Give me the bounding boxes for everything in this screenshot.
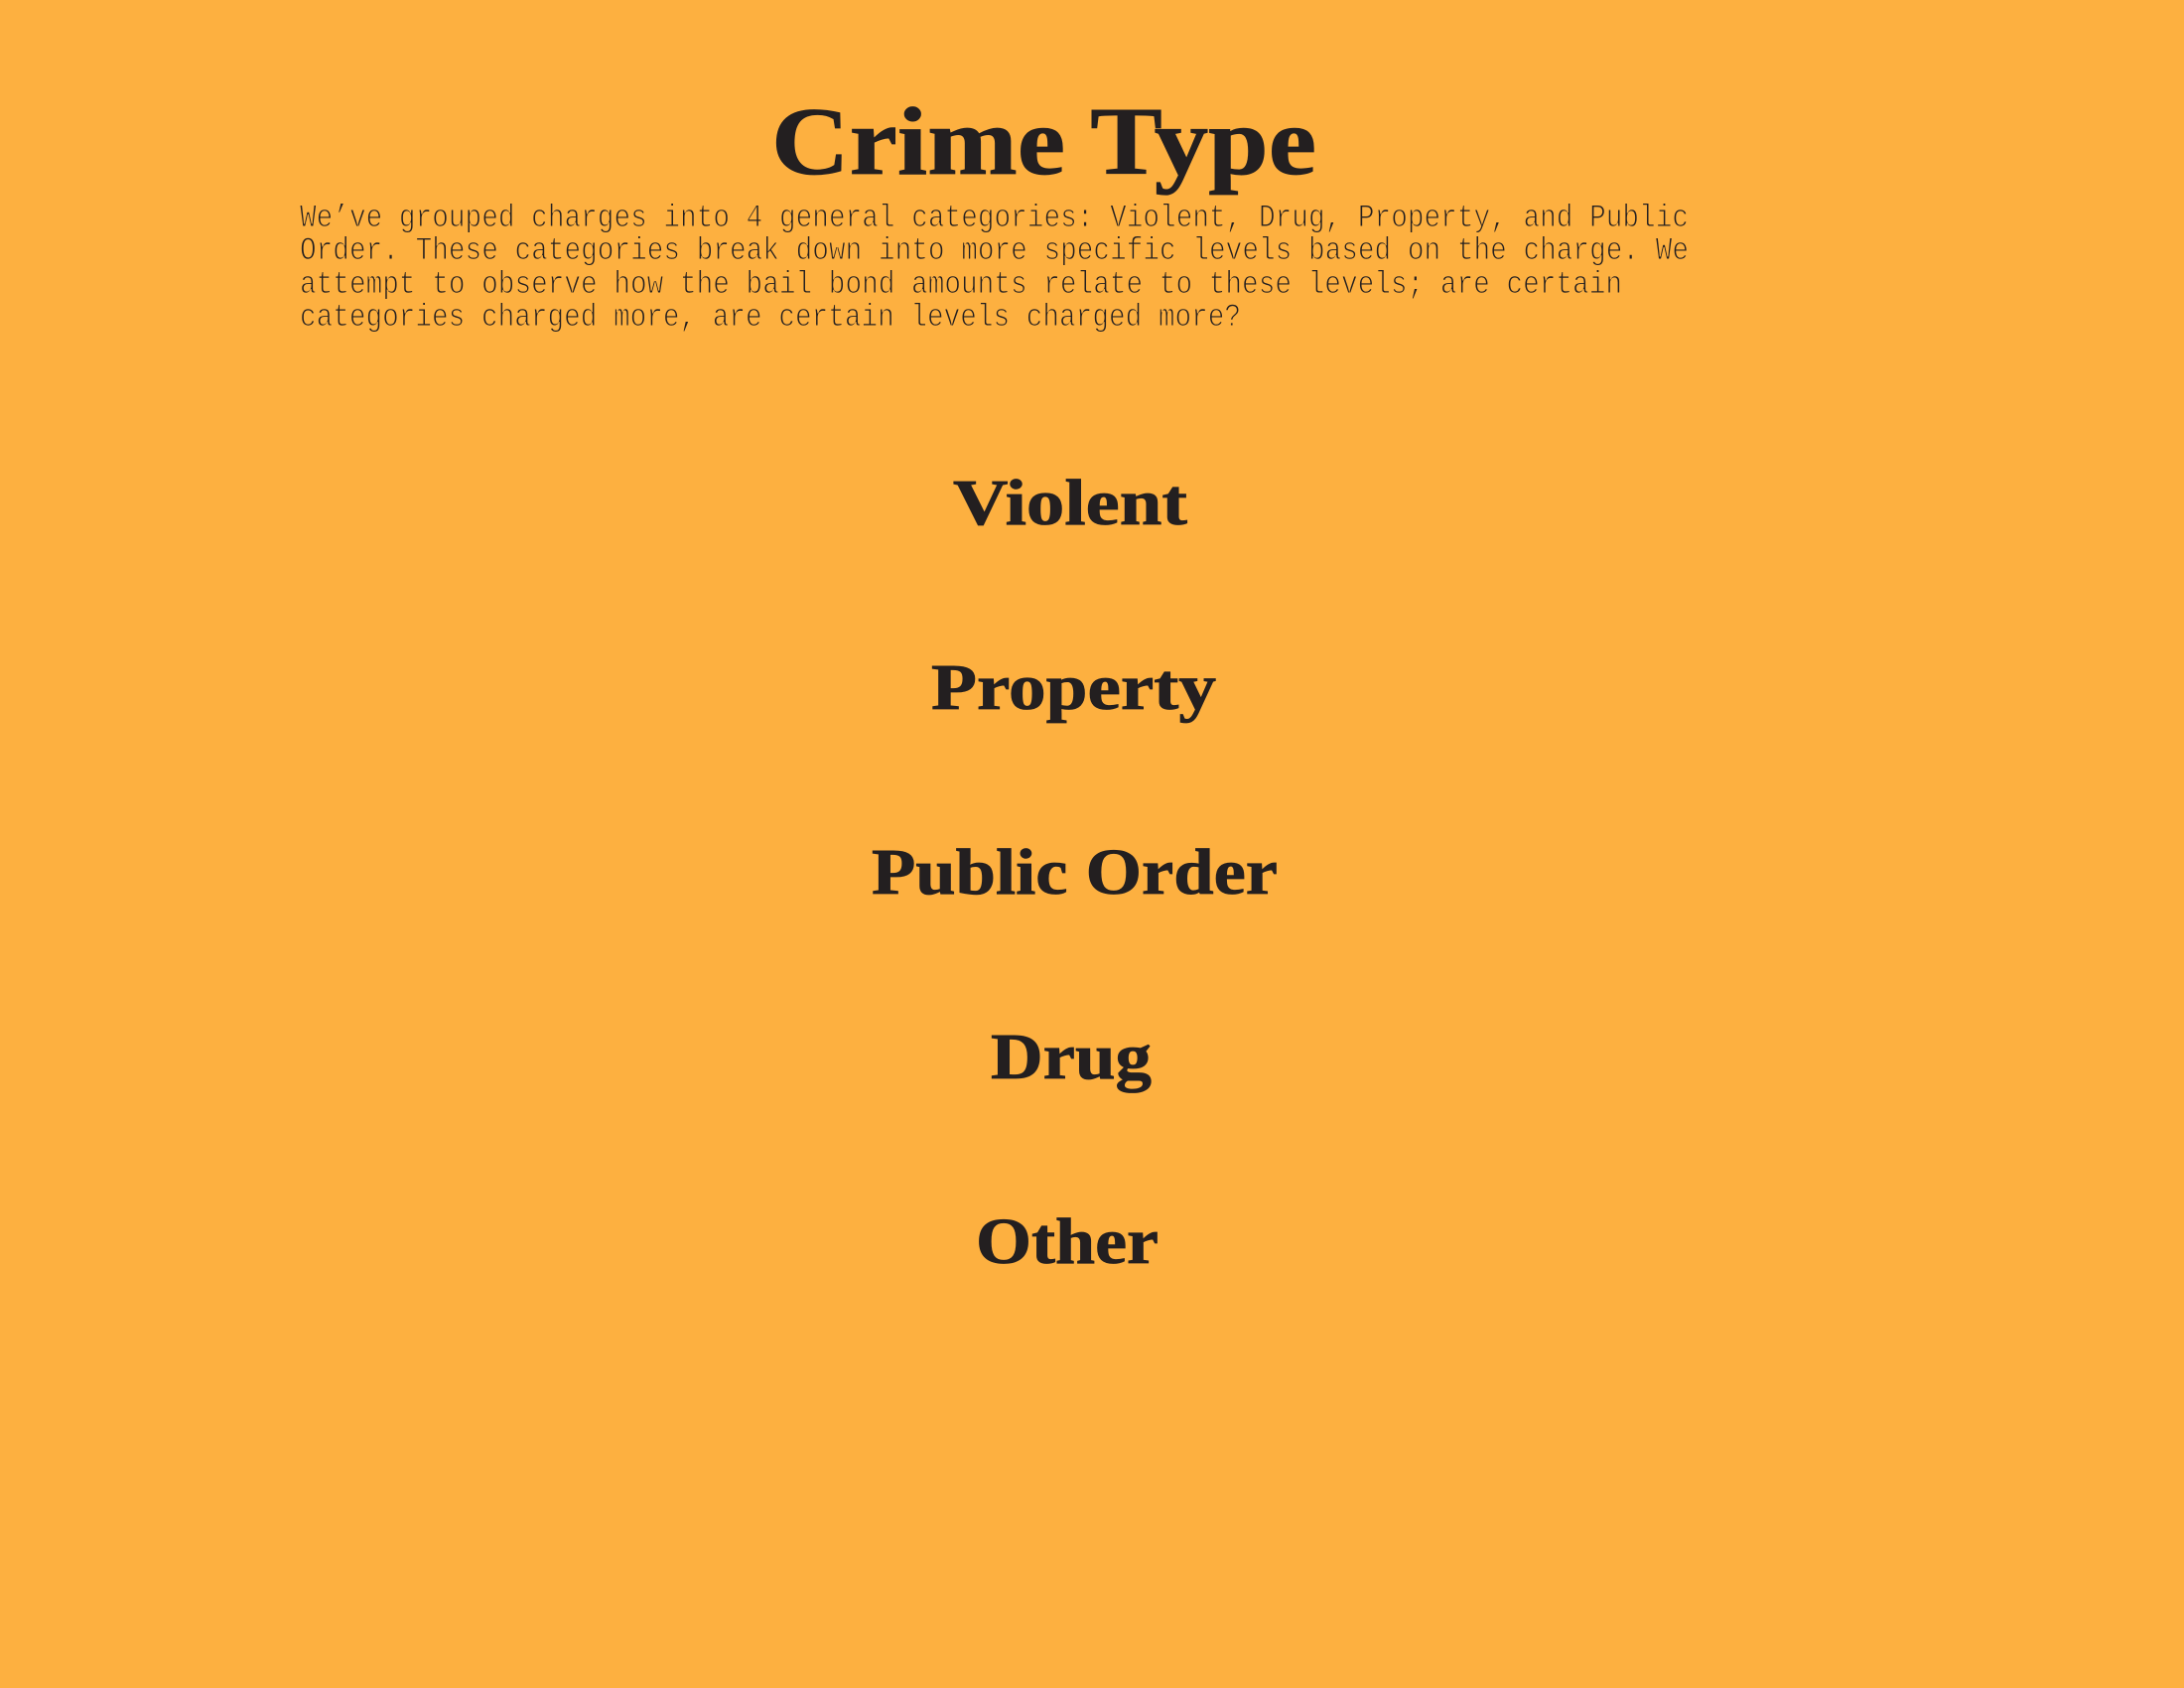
category heading: Property: Property bbox=[931, 651, 1216, 724]
intro text block: attempt to observe how the bail bond amounts relate to these levels; are certain bbox=[300, 266, 1622, 303]
category heading: Other: Other bbox=[976, 1205, 1159, 1278]
intro text block: categories charged more, are certain levels charged more? bbox=[300, 299, 1241, 336]
category heading: Violent: Violent bbox=[953, 467, 1187, 539]
intro text block: Order. These categories break down into more specific levels based on the charge. We bbox=[300, 232, 1689, 269]
intro text block: We’ve grouped charges into 4 general categories: Violent, Drug, Property, and Public bbox=[300, 200, 1689, 236]
category heading: Public Order: Public Order bbox=[872, 836, 1278, 909]
title: Crime Type bbox=[771, 88, 1316, 196]
category heading: Drug: Drug bbox=[991, 1021, 1152, 1093]
intro text block bbox=[300, 200, 1689, 336]
